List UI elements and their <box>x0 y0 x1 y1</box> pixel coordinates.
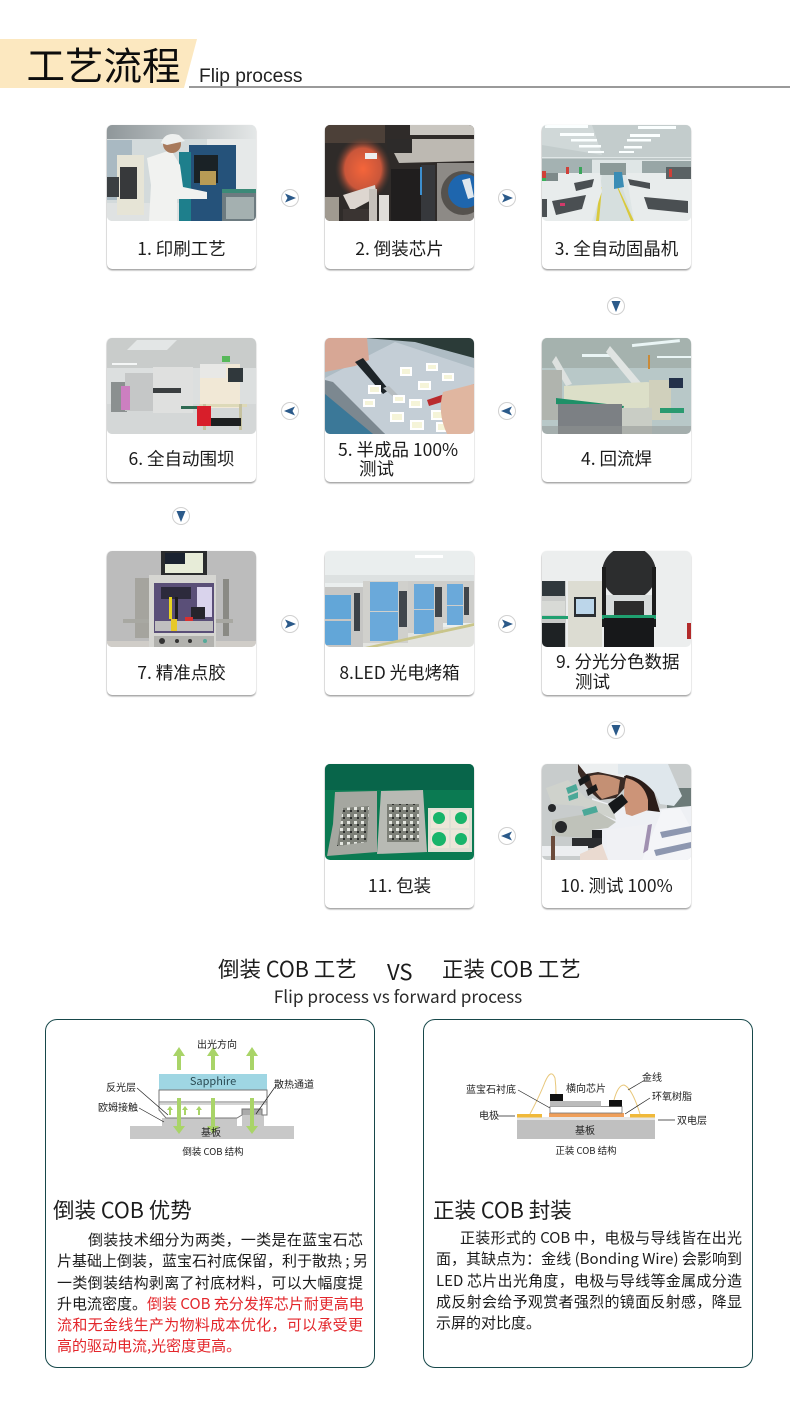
text block: forward COB: 成反射会给予观赏者强烈的镜面反射感，降显 <box>436 1291 742 1312</box>
diagram: forward COB structure: 横向芯片 <box>566 1080 606 1095</box>
diagram: flip COB structure: 欧姆接触 <box>98 1099 138 1114</box>
diagram: forward COB structure: 蓝宝石衬底 <box>466 1081 516 1096</box>
VS mark: VS <box>387 955 413 987</box>
title: 工艺流程 <box>26 36 181 92</box>
heading: flip COB advantage: 倒装 COB 优势 <box>53 1194 192 1225</box>
diagram: flip COB structure: Sapphire <box>190 1073 236 1089</box>
arrow 2-3 <box>498 189 516 207</box>
photo: die bonder room <box>542 125 691 221</box>
text block: forward COB: 面，其缺点为：金线 (Bonding Wire) 会影响到 <box>436 1248 742 1269</box>
card 5 <box>325 338 474 482</box>
forward COB title: 正装 COB 工艺 <box>442 953 581 984</box>
arrow 5-6 <box>281 402 299 420</box>
text block: forward COB <box>436 1227 742 1333</box>
text block: flip COB: 流和无金线生产为物料成本优化，可以承受更 <box>57 1314 363 1335</box>
text block: forward COB: LED 芯片出光角度，电极与导线等金属成分造 <box>436 1270 742 1291</box>
arrow 10-11 <box>498 827 516 845</box>
photo: LED test probes <box>325 338 474 434</box>
English subtitle: Flip process vs forward process <box>274 983 522 1008</box>
label: 9. 分光分色数据 <box>556 649 680 674</box>
text block: flip COB: 升电流密度。倒装 COB 充分发挥芯片耐更高电 <box>57 1293 364 1314</box>
card 4 <box>542 338 691 482</box>
panel: flip COB <box>45 1019 375 1368</box>
label: 7. 精准点胶 <box>137 660 226 685</box>
text block: forward COB: 示屏的对比度。 <box>436 1312 541 1333</box>
diagram: flip COB structure: 倒装 COB 结构 <box>182 1144 244 1158</box>
text block: flip COB: 高的驱动电流,光密度更高。 <box>57 1335 241 1356</box>
card 9 <box>542 551 691 695</box>
card 2 <box>325 125 474 269</box>
photo: ovens <box>325 551 474 647</box>
photo: flip chip machine <box>325 125 474 221</box>
label: 1. 印刷工艺 <box>137 236 226 261</box>
card 10 <box>542 764 691 908</box>
label: 2. 倒装芯片 <box>355 236 444 261</box>
label <box>338 436 458 481</box>
card 11 <box>325 764 474 908</box>
diagram: forward COB structure: 正装 COB 结构 <box>555 1143 617 1157</box>
label: 4. 回流焊 <box>581 446 652 471</box>
diagram: forward COB structure <box>466 1069 707 1157</box>
label: 6. 全自动围坝 <box>128 446 234 471</box>
card 1 <box>107 125 256 269</box>
diagram: flip COB structure: 散热通道 <box>274 1076 314 1091</box>
arrow 9-10 <box>607 721 625 739</box>
label <box>556 649 680 694</box>
diagram: forward COB structure: 环氧树脂 <box>652 1088 692 1103</box>
photo: dispensing machine <box>107 551 256 647</box>
text block: flip COB: 倒装技术细分为两类，一类是在蓝宝石芯 <box>88 1229 363 1250</box>
photo: microscope inspection <box>542 764 691 860</box>
label: 测试 <box>575 669 610 694</box>
label: 10. 测试 100% <box>560 873 673 898</box>
diagram: flip COB structure: 反光层 <box>106 1079 136 1094</box>
diagram: forward COB structure: 基板 <box>575 1122 595 1137</box>
diagram: forward COB structure: 电极 <box>479 1107 499 1122</box>
arrow 4-5 <box>498 402 516 420</box>
arrow 3-4 <box>607 297 625 315</box>
diagram: forward COB structure: 双电层 <box>677 1112 707 1127</box>
card 8 <box>325 551 474 695</box>
arrow 8-9 <box>498 615 516 633</box>
arrow 1-2 <box>281 189 299 207</box>
photo: packaged LEDs <box>325 764 474 860</box>
diagram: flip COB structure <box>98 1036 314 1158</box>
label: 11. 包装 <box>368 873 431 898</box>
arrow 7-8 <box>281 615 299 633</box>
flip COB title: 倒装 COB 工艺 <box>218 953 357 984</box>
photo: printing operator <box>107 125 256 221</box>
panel: forward COB <box>423 1019 753 1368</box>
text block: flip COB: 一类倒装结构剥离了衬底材料，可以大幅度提 <box>57 1272 363 1293</box>
header band <box>0 39 790 88</box>
photo: spectrometer <box>542 551 691 647</box>
label: 测试 <box>359 456 394 481</box>
photo: reflow oven <box>542 338 691 434</box>
diagram: flip COB structure: 出光方向 <box>197 1036 237 1051</box>
card 3 <box>542 125 691 269</box>
text block: flip COB: 片基础上倒装，蓝宝石衬底保留，利于散热 ; 另 <box>57 1250 368 1271</box>
text block: flip COB <box>57 1229 368 1356</box>
label: 3. 全自动固晶机 <box>555 236 678 261</box>
label: 8.LED 光电烤箱 <box>339 660 460 685</box>
subtitle: Flip process <box>199 66 302 87</box>
photo: dam machine room <box>107 338 256 434</box>
arrow 6-7 <box>172 507 190 525</box>
diagram: flip COB structure: 基板 <box>201 1124 221 1139</box>
text block: forward COB: 正装形式的 COB 中，电极与导线皆在出光 <box>460 1227 742 1248</box>
diagram: forward COB structure: 金线 <box>642 1069 662 1084</box>
heading: forward COB package: 正装 COB 封装 <box>433 1194 572 1225</box>
comparison heading <box>218 953 581 1008</box>
card 7 <box>107 551 256 695</box>
label: 5. 半成品 100% <box>338 436 458 462</box>
card 6 <box>107 338 256 482</box>
